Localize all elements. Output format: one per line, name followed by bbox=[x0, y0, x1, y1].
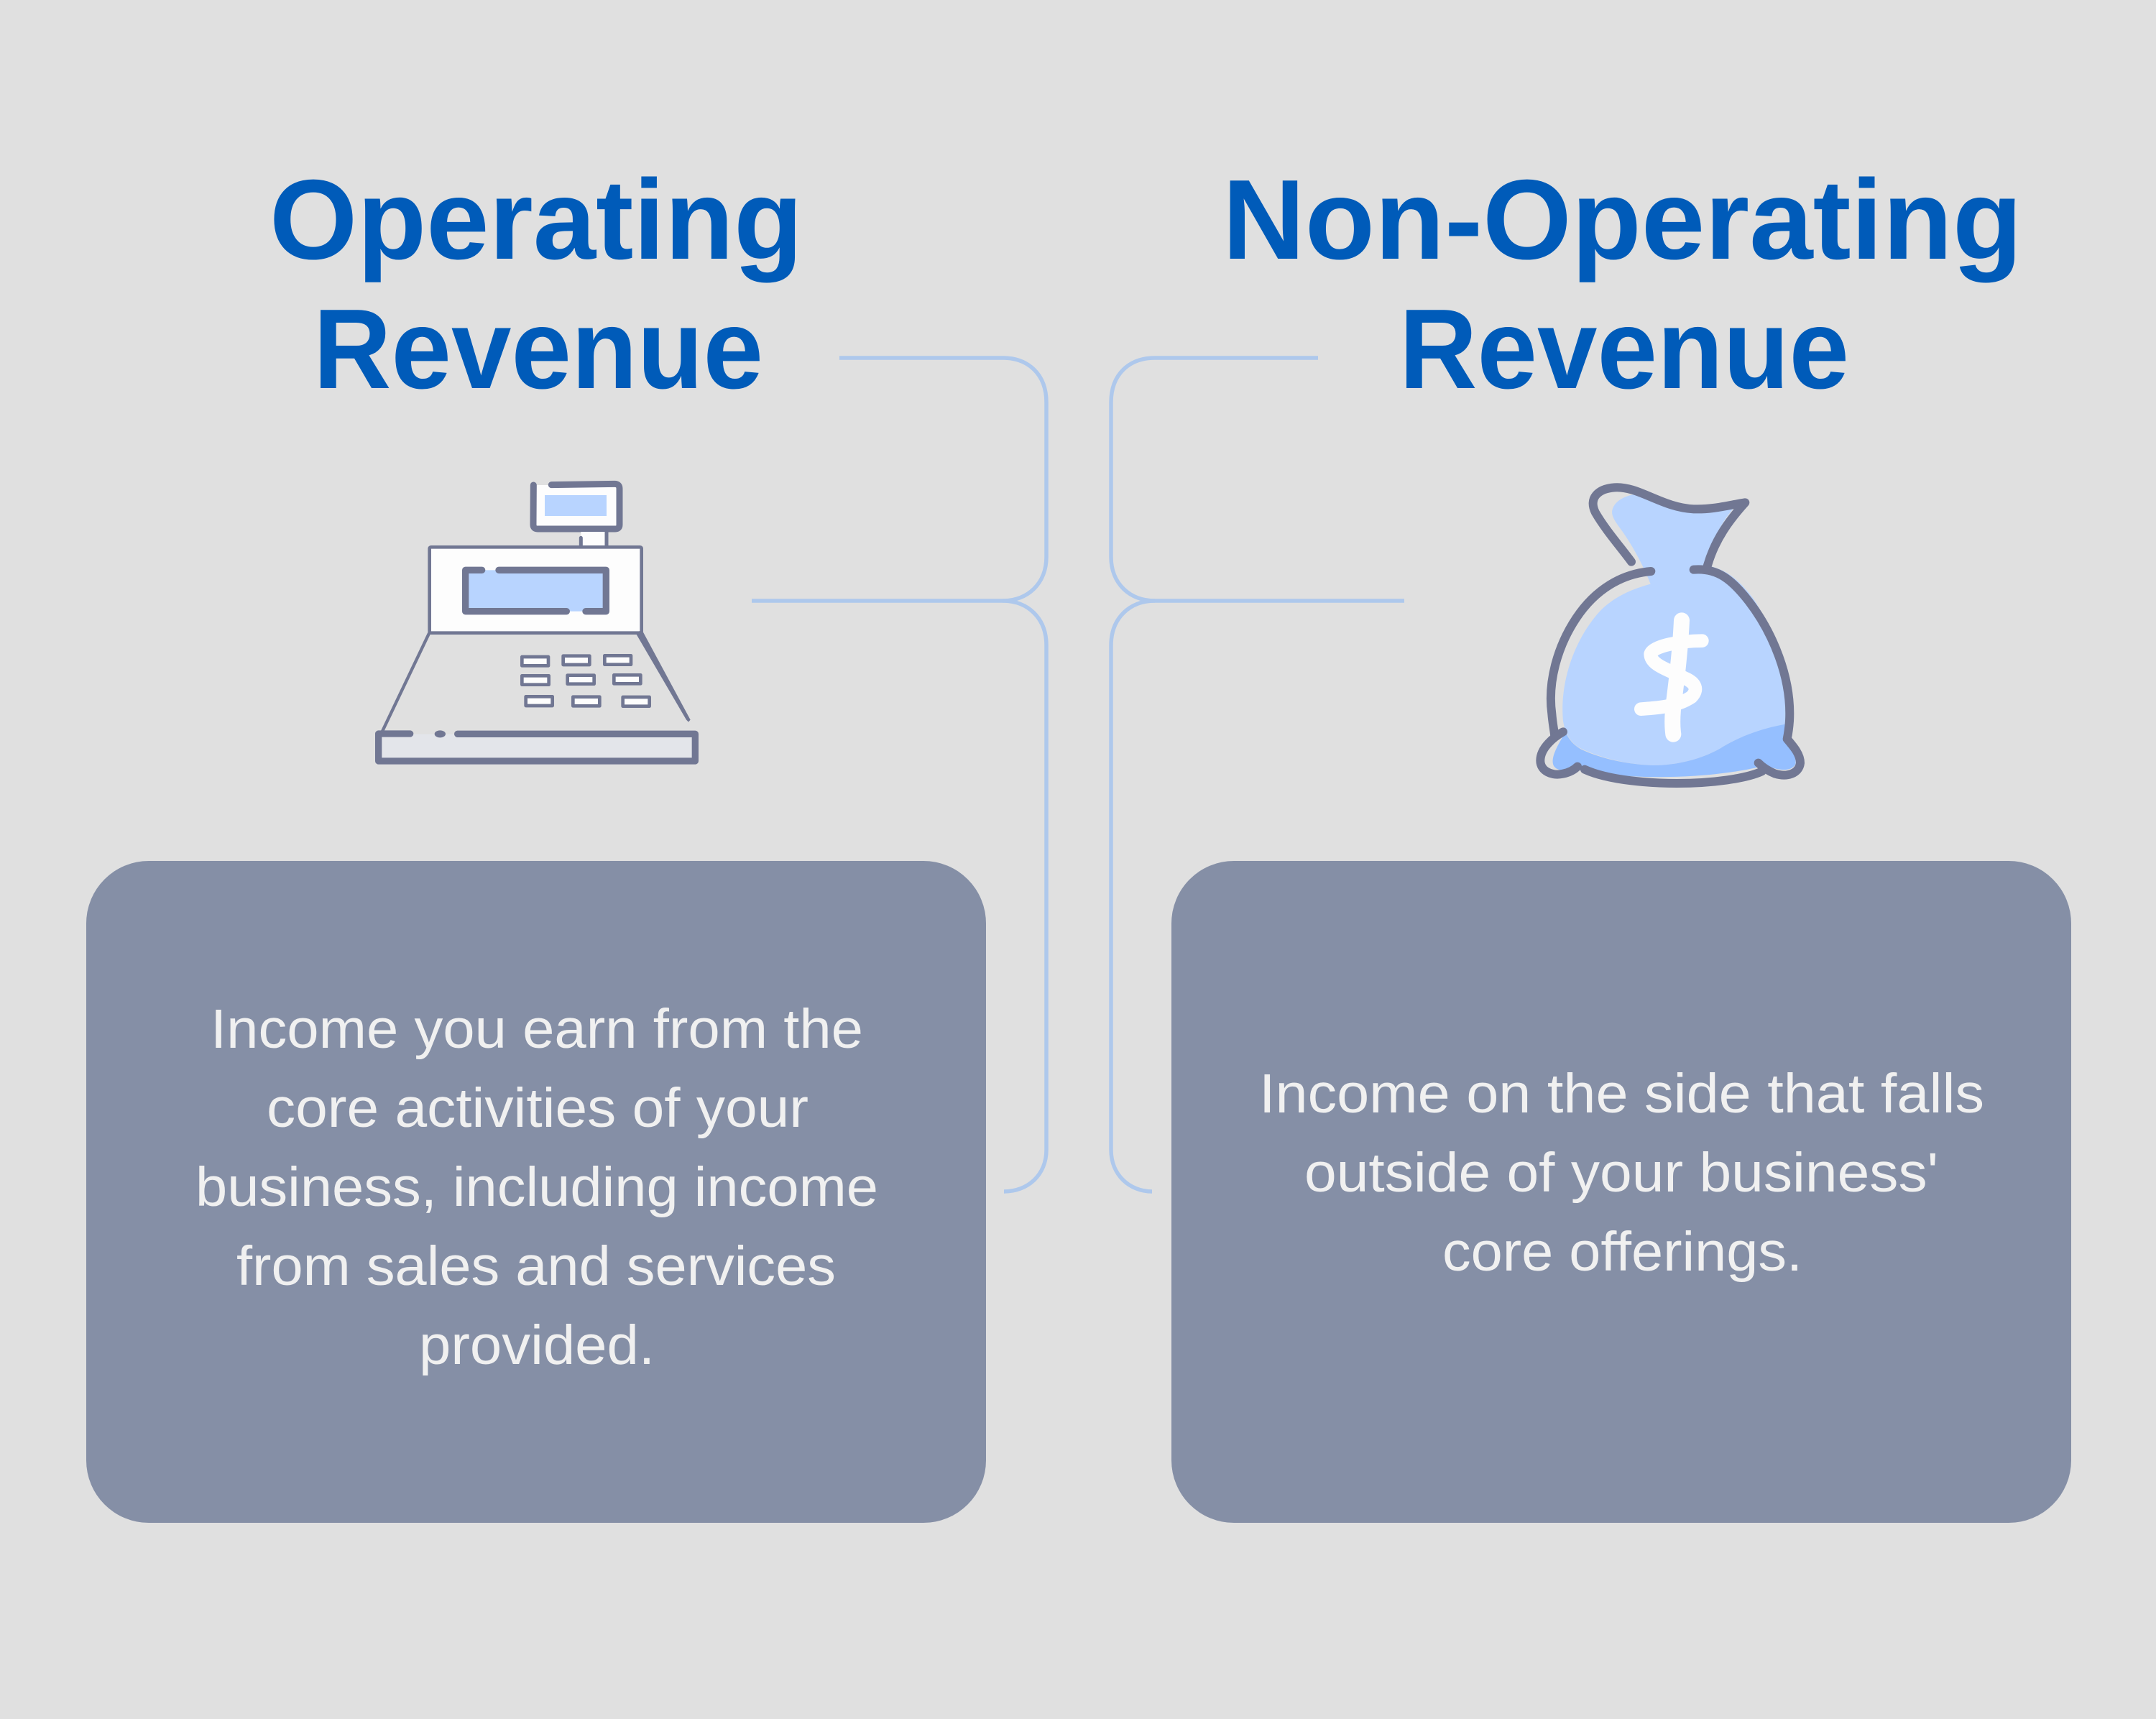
heading: Non-Operating Revenue: Non-Operating bbox=[1222, 157, 2022, 283]
heading: Non-Operating Revenue bbox=[1222, 157, 2022, 413]
heading: Operating Revenue: Operating bbox=[270, 157, 803, 283]
heading: Non-Operating Revenue: Revenue bbox=[1399, 286, 1849, 413]
text block: operating revenue definition: business, including income bbox=[195, 1156, 878, 1218]
text block: non-operating revenue definition: outside of your business' bbox=[1304, 1142, 1938, 1204]
text block: operating revenue definition: core activities of your bbox=[267, 1077, 808, 1139]
icon: money bag bbox=[1540, 487, 1800, 783]
text block: operating revenue definition: Income you earn from the bbox=[211, 998, 863, 1060]
panel: operating revenue description bbox=[86, 861, 986, 1523]
heading: Operating Revenue bbox=[270, 157, 803, 413]
text block: operating revenue definition: provided. bbox=[419, 1314, 655, 1376]
heading: Operating Revenue: Revenue bbox=[313, 286, 763, 413]
panel: non-operating revenue description bbox=[1171, 861, 2071, 1523]
text block: non-operating revenue definition: core offerings. bbox=[1442, 1221, 1802, 1283]
text block: non-operating revenue definition bbox=[1259, 1063, 1984, 1283]
text block: operating revenue definition: from sales and services bbox=[236, 1235, 836, 1297]
connector lines: right bracket bbox=[1111, 358, 1404, 1192]
connector lines: left bracket bbox=[752, 358, 1046, 1192]
icon: cash register bbox=[379, 484, 695, 761]
text block: operating revenue definition bbox=[195, 998, 878, 1376]
text block: non-operating revenue definition: Income on the side that falls bbox=[1259, 1063, 1984, 1125]
